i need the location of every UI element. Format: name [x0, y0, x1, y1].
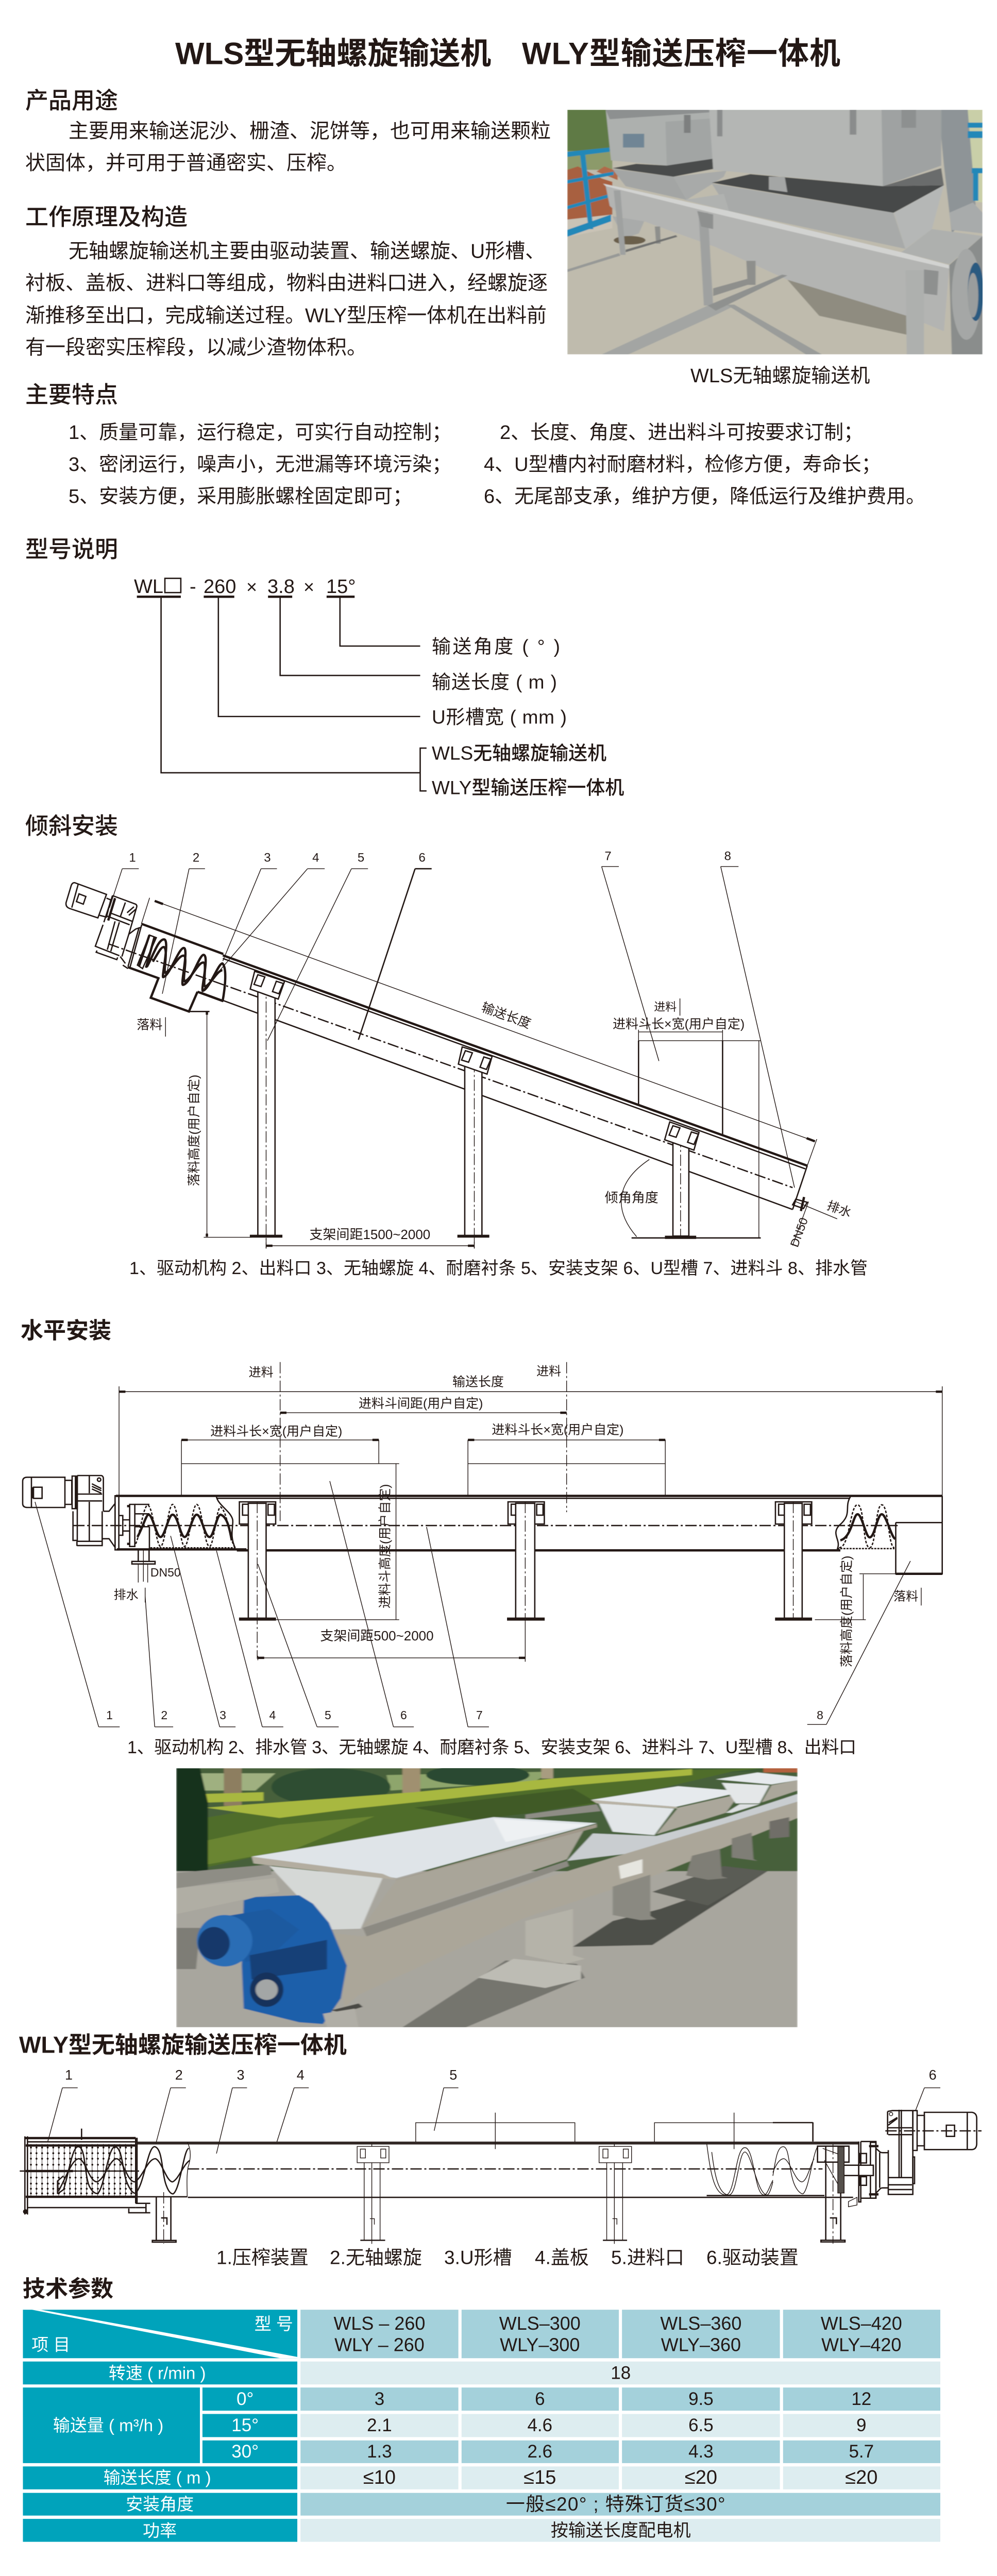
model code diagram: 260: [204, 576, 236, 598]
table values: ≤20: [845, 2467, 877, 2488]
labels: 8: [817, 1708, 823, 1722]
hopper: [638, 1030, 761, 1238]
text block: 工作原理及构造: [25, 240, 548, 359]
caption: WLY parts: [216, 2247, 799, 2268]
table values: WLS–420: [821, 2313, 902, 2334]
table values: 6.5: [688, 2415, 714, 2435]
table header labels: 型 号: [255, 2314, 293, 2333]
dimension lines: [141, 898, 837, 1248]
text block: 工作原理及构造: 无轴螺旋输送机主要由驱动装置、输送螺旋、U形槽、: [69, 240, 545, 263]
part numbers and labels: 输送长度: [480, 1000, 533, 1031]
title part two: WLY型输送压榨一体机: [522, 36, 840, 71]
caption: WLY parts: 3.U形槽: [444, 2247, 512, 2268]
model code diagram: 输送长度 ( m ): [432, 672, 557, 692]
labels: 7: [476, 1708, 483, 1722]
part numbers and labels: 2: [193, 851, 199, 865]
photo caption: WLS无轴螺旋输送机: [690, 365, 870, 387]
photo: WLS conveyor: [567, 110, 984, 354]
table values: 9.5: [688, 2389, 714, 2409]
table values: 5.7: [849, 2442, 874, 2462]
table values: WLS – 260: [333, 2313, 425, 2334]
part numbers and labels: 排水: [825, 1199, 853, 1220]
labels: 进料斗间距(用户自定): [359, 1396, 483, 1411]
model code diagram: 输送角度 ( ° ): [432, 636, 560, 657]
part numbers and labels: 落料: [137, 1018, 162, 1032]
mid legs: [357, 2143, 632, 2244]
leader lines: [48, 2088, 940, 2154]
table header labels: [31, 2314, 293, 2540]
model code diagram: -: [190, 576, 196, 598]
table values: 12: [851, 2389, 871, 2409]
caption: WLY parts: 2.无轴螺旋: [330, 2247, 422, 2268]
table values: 一般≤20° ; 特殊订货≤30°: [506, 2494, 725, 2515]
text block: features: 3、密闭运行，噪声小，无泄漏等环境污染；: [69, 454, 451, 476]
part numbers and labels: [129, 849, 853, 1249]
right screw: [707, 2143, 824, 2196]
diagram: WLY press conveyor: [20, 2067, 982, 2244]
labels: 2: [161, 1708, 167, 1722]
part numbers and labels: 7: [604, 849, 612, 863]
part numbers: 3: [237, 2067, 245, 2083]
table header labels: 输送量 ( m³/h ): [53, 2416, 163, 2435]
drive section detail: [773, 2110, 982, 2244]
text block: features: 4、U型槽内衬耐磨材料，检修方便，寿命长；: [484, 454, 881, 476]
heading: 倾斜安装: 倾斜安装: [25, 813, 118, 839]
heading: 型号说明: 型号说明: [25, 536, 118, 563]
table values: 2.1: [367, 2415, 392, 2435]
caption: WLY parts: 1.压榨装置: [216, 2247, 309, 2268]
table values: WLY–420: [821, 2334, 901, 2355]
part numbers: 1: [65, 2067, 73, 2083]
table values: 2.6: [527, 2442, 552, 2462]
table values: ≤10: [363, 2467, 396, 2488]
title: WLS型无轴螺旋输送机: [175, 36, 491, 71]
caption: inclined parts: 1、驱动机构 2、出料口 3、无轴螺旋 4、耐磨衬条 5、安装支架 6、U型槽 7、进料斗 8、排水管: [129, 1259, 868, 1278]
model code diagram: WLY型输送压榨一体机: [432, 777, 624, 799]
labels: 支架间距500~2000: [320, 1628, 434, 1643]
outlet: [895, 1522, 942, 1574]
text block: 工作原理及构造: 渐推移至出口，完成输送过程。WLY型压榨一体机在出料前: [25, 305, 547, 327]
part numbers: [65, 2067, 937, 2083]
labels: 进料斗长×宽(用户自定): [210, 1424, 342, 1438]
model code diagram: WLS无轴螺旋输送机: [432, 743, 606, 764]
heading: 产品用途: 产品用途: [25, 88, 118, 113]
part numbers and labels: 5: [358, 851, 364, 865]
labels: 排水: [114, 1588, 139, 1602]
table header labels: 项 目: [31, 2335, 70, 2354]
photo: conveyor with hoppers: [176, 1765, 798, 2027]
table header labels: 转速 ( r/min ): [109, 2363, 206, 2382]
part numbers and labels: 进料: [654, 1001, 677, 1013]
labels: 1: [106, 1708, 113, 1722]
part numbers and labels: 支架间距1500~2000: [310, 1227, 430, 1242]
caption: horizontal parts: 1、驱动机构 2、排水管 3、无轴螺旋 4、耐磨衬条 5、安装支架 6、进料斗 7、U型槽 8、出料口: [127, 1738, 856, 1757]
heading: 技术参数: 技术参数: [23, 2276, 113, 2302]
table values: WLY–360: [661, 2334, 741, 2355]
leader lines: [110, 867, 795, 1188]
diagram: horizontal installation: [23, 1362, 942, 1727]
text block: features: 6、无尾部支承，维护方便，降低运行及维护费用。: [484, 486, 925, 507]
table values: ≤20: [685, 2467, 717, 2488]
part numbers: 4: [297, 2067, 305, 2083]
table values: 1.3: [367, 2442, 392, 2462]
model code diagram: WL: [134, 576, 163, 598]
table values: 4.6: [527, 2415, 552, 2435]
part numbers and labels: 6: [419, 851, 426, 865]
labels: 进料: [249, 1365, 274, 1379]
table header labels: 输送长度 ( m ): [104, 2468, 211, 2487]
table values: ≤15: [523, 2467, 556, 2488]
part numbers and labels: 4: [312, 851, 319, 865]
diagram: inclined installation: [66, 849, 853, 1249]
model code diagram: 15°: [326, 576, 356, 598]
heading: 工作原理及构造: 工作原理及构造: [25, 204, 188, 230]
table values: 3: [375, 2389, 384, 2409]
table: technical parameters: [23, 2310, 940, 2542]
part numbers and labels: DN50: [787, 1216, 810, 1249]
table values: 按输送长度配电机: [551, 2521, 691, 2540]
table header labels: 15°: [231, 2415, 259, 2435]
text block: 产品用途: [25, 121, 551, 174]
text block: features: 1、质量可靠，运行稳定，可实行自动控制；: [69, 422, 451, 444]
heading: WLY type machine: WLY型无轴螺旋输送压榨一体机: [19, 2032, 347, 2058]
table values: 9: [856, 2415, 866, 2435]
text block: features: 2、长度、角度、进出料斗可按要求订制；: [500, 422, 863, 444]
heading: 主要特点: 主要特点: [25, 381, 118, 408]
text block: 工作原理及构造: 有一段密实压榨段，以减少渣物体积。: [25, 337, 367, 359]
table values: [333, 2313, 902, 2540]
hoppers: [416, 2113, 814, 2149]
caption: WLY parts: 6.驱动装置: [706, 2247, 799, 2268]
heading: 水平安装: 水平安装: [21, 1318, 111, 1344]
part numbers: 5: [449, 2067, 457, 2083]
table values: WLS–360: [660, 2313, 741, 2334]
caption: WLY parts: 5.进料口: [611, 2247, 684, 2268]
press section detail: [20, 2129, 190, 2244]
drive and screw detail: [66, 883, 225, 1011]
model code diagram: [134, 576, 624, 799]
part numbers and labels: 落料高度(用户自定): [187, 1075, 201, 1186]
labels: 6: [400, 1708, 407, 1722]
text block: 产品用途: 主要用来输送泥沙、栅渣、泥饼等，也可用来输送颗粒: [69, 121, 551, 142]
labels: 5: [325, 1708, 331, 1722]
table header labels: 30°: [231, 2442, 259, 2462]
table values: WLY – 260: [334, 2334, 425, 2355]
part numbers and labels: 倾角角度: [605, 1190, 658, 1206]
right screw: [836, 1497, 895, 1549]
labels: 4: [269, 1708, 276, 1722]
model code diagram: ×: [303, 576, 314, 598]
legs and brackets: [240, 1502, 812, 1662]
part numbers and labels: 8: [724, 849, 731, 863]
model code diagram: ×: [246, 576, 257, 598]
table cell fills: [23, 2310, 940, 2542]
part numbers and labels: 进料斗长×宽(用户自定): [613, 1017, 745, 1031]
leader lines: [35, 1481, 910, 1727]
part numbers: 2: [175, 2067, 183, 2083]
table values: 18: [611, 2363, 631, 2383]
table values: WLY–300: [500, 2334, 580, 2355]
text block: features: [69, 422, 925, 507]
text block: 工作原理及构造: 衬板、盖板、进料口等组成，物料由进料口进入，经螺旋逐: [25, 272, 548, 295]
press section perforation dots: [31, 2144, 132, 2197]
part numbers: 6: [929, 2067, 937, 2083]
table header labels: 0°: [236, 2389, 254, 2409]
labels: 落料: [893, 1589, 918, 1603]
labels: 输送长度: [452, 1375, 504, 1389]
drive and screw detail: [23, 1476, 246, 1583]
text block: 产品用途: 状固体，并可用于普通密实、压榨。: [25, 152, 347, 174]
table values: 4.3: [688, 2442, 714, 2462]
labels: 落料高度(用户自定): [839, 1555, 854, 1667]
model code diagram: 3.8: [267, 576, 295, 598]
legs: [250, 971, 761, 1248]
table values: WLS–300: [499, 2313, 581, 2334]
labels: 进料斗高度(用户自定): [378, 1484, 393, 1608]
part numbers and labels: 1: [129, 851, 136, 865]
labels: 进料: [536, 1365, 561, 1379]
labels: [106, 1365, 918, 1722]
part numbers and labels: 3: [264, 851, 271, 865]
table values: 6: [535, 2389, 545, 2409]
table header labels: 功率: [143, 2521, 177, 2540]
table header labels: 安装角度: [126, 2495, 194, 2514]
model code diagram: U形槽宽 ( mm ): [432, 707, 567, 727]
labels: 进料斗长×宽(用户自定): [492, 1422, 623, 1437]
labels: DN50: [150, 1566, 181, 1579]
text block: features: 5、安装方便，采用膨胀螺栓固定即可；: [69, 486, 412, 507]
labels: 3: [219, 1708, 226, 1722]
caption: WLY parts: 4.盖板: [535, 2247, 589, 2268]
